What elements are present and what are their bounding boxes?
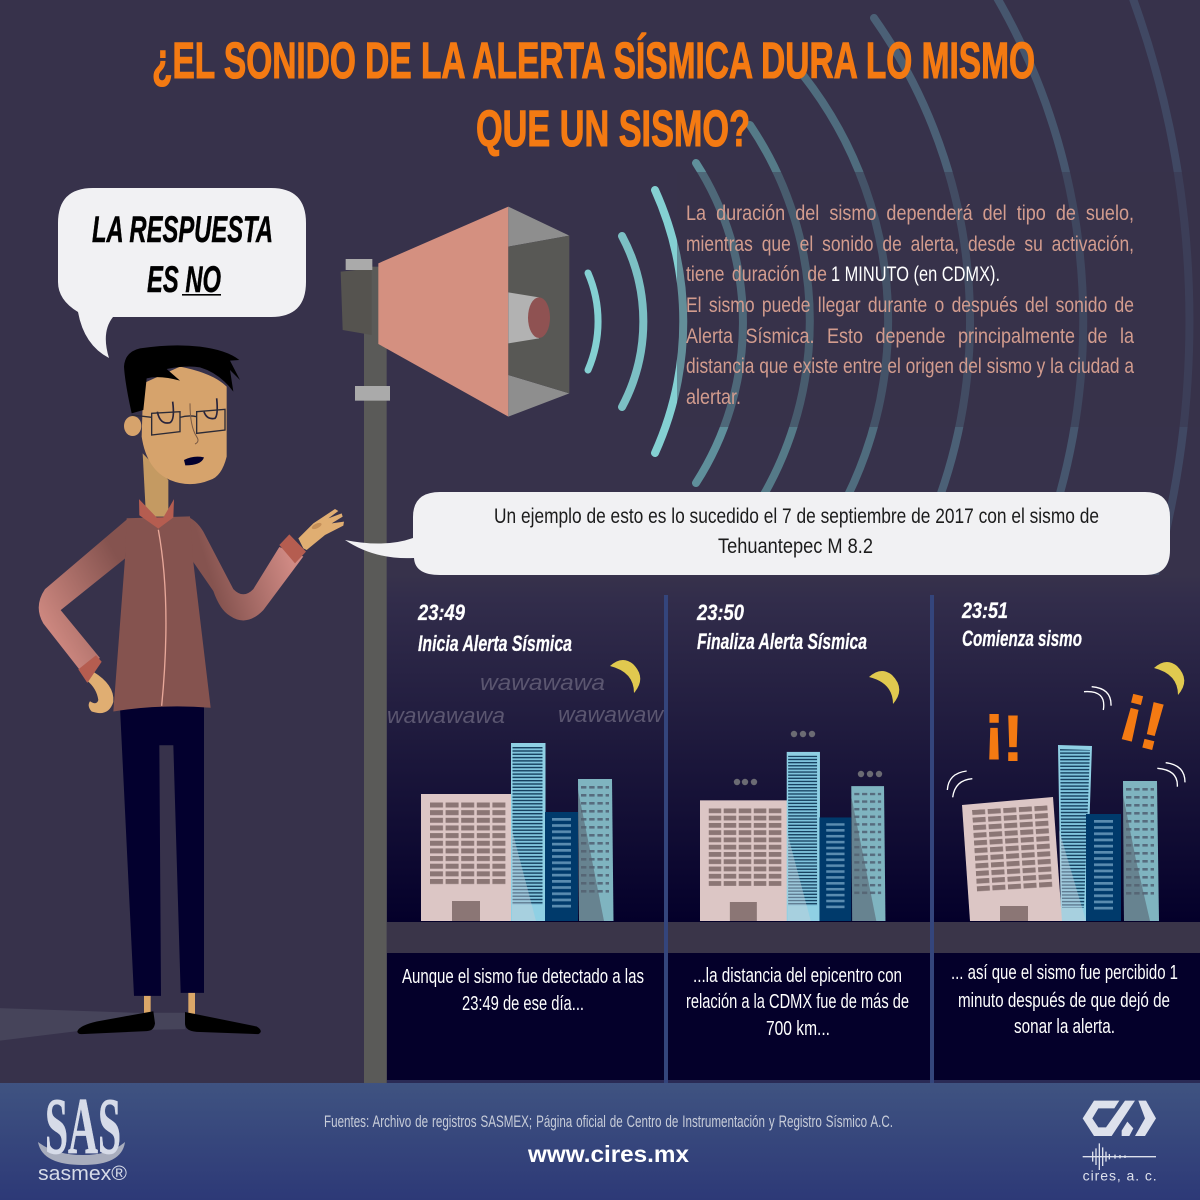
buildings tilted [962,745,1159,921]
panel 2 caption [686,965,909,1040]
hair [124,345,240,413]
speech bubble: la respuesta es no: ES NO [147,259,221,300]
exclamation right [1111,668,1177,766]
zipper [158,530,166,706]
floor shadow [0,1008,185,1041]
glasses [132,409,225,435]
nose [190,403,198,444]
exclamation right: ¡ [1114,668,1156,747]
face [142,367,227,484]
exclamation left: ! [1002,701,1024,775]
sound waves [588,0,1189,646]
neck [143,453,168,517]
eyes [157,398,217,423]
buildings [421,743,614,921]
footer band [0,1083,1200,1200]
panel 2 caption: relación a la CDMX fue de más de [686,991,909,1013]
panel 3 heading: 23:51 [961,598,1008,623]
exclamation left [983,689,1024,775]
logo: cires [1083,1101,1157,1184]
alarm sound text: wawawaw [558,702,665,727]
panel 2 heading: Finaliza Alerta Sísmica [697,629,867,654]
speech bubble: example [345,492,1170,575]
panel 3 caption [951,962,1178,1038]
left cuff [78,655,102,683]
trousers [120,704,204,996]
panel 2 heading: 23:50 [696,600,745,625]
character: head [124,345,240,517]
exclamation right: ! [1132,687,1174,766]
speech bubble: example: Tehuantepec M 8.2 [718,535,873,558]
alarm sound text [387,670,665,728]
panel 1 heading: Inicia Alerta Sísmica [418,631,572,656]
alarm sound text: wawawawa [480,670,605,695]
speech bubble: la respuesta es no [58,188,306,358]
panel 1 heading [417,600,572,656]
panel 1 caption: 23:49 de ese día... [462,993,584,1015]
shoes [77,1011,261,1034]
logo: sasmex [38,1083,127,1185]
panel 1: inicia alerta [387,600,665,1015]
explanatory paragraph [686,201,1134,409]
torso [113,516,211,712]
logo: sasmex: sasmex® [38,1163,127,1185]
website: www.cires.mx [527,1141,689,1167]
logo: sasmex: SAS [45,1083,121,1171]
character: body [0,516,303,1041]
text backing band [677,172,1200,427]
speaker on pole [341,207,569,1083]
panel 2 heading [696,600,867,654]
shaking lines [947,687,1185,797]
right arm [187,516,303,620]
moon [1154,662,1184,695]
moon [869,671,899,704]
explanatory paragraph: tiene duración de [686,262,827,286]
title [152,32,1035,157]
character: raised hand and cuff [279,509,344,563]
mouth [184,457,204,465]
panel 3: comienza sismo [947,598,1185,1038]
panel 1 caption: Aunque el sismo fue detectado a las [402,966,644,988]
ankles [144,991,195,1014]
explanatory paragraph: alertar. [686,385,741,409]
panel 1 caption [402,966,644,1015]
panel 3 caption: sonar la alerta. [1014,1016,1115,1038]
silence dots [734,731,882,785]
buildings [700,752,885,921]
panel 2 caption: 700 km... [766,1018,830,1040]
panel: timeline background [387,575,1200,1083]
exclamation left: ¡ [983,689,1005,763]
panel 3 heading [961,598,1082,651]
left arm [39,518,128,670]
title: QUE UN SISMO? [476,100,750,157]
panel 1 heading: 23:49 [417,600,466,625]
character: collar [139,499,174,529]
moon [610,660,640,693]
ear [124,416,141,436]
left hand [87,671,113,713]
panel 3 heading: Comienza sismo [962,626,1082,651]
explanatory paragraph: 1 MINUTO (en CDMX). [831,262,1000,286]
logo: cires: cires, a. c. [1083,1168,1157,1184]
panel 2: finaliza alerta [686,600,909,1040]
speech bubble: la respuesta es no: LA RESPUESTA [92,209,273,250]
sources text: Fuentes: Archivo de registros SASMEX; Página oficial de Centro de Instrumentación y Registro Sísmico A.C. [324,1112,893,1131]
alarm sound text: wawawawa [387,703,505,728]
panel 2 caption: ...la distancia del epicentro con [693,965,902,987]
